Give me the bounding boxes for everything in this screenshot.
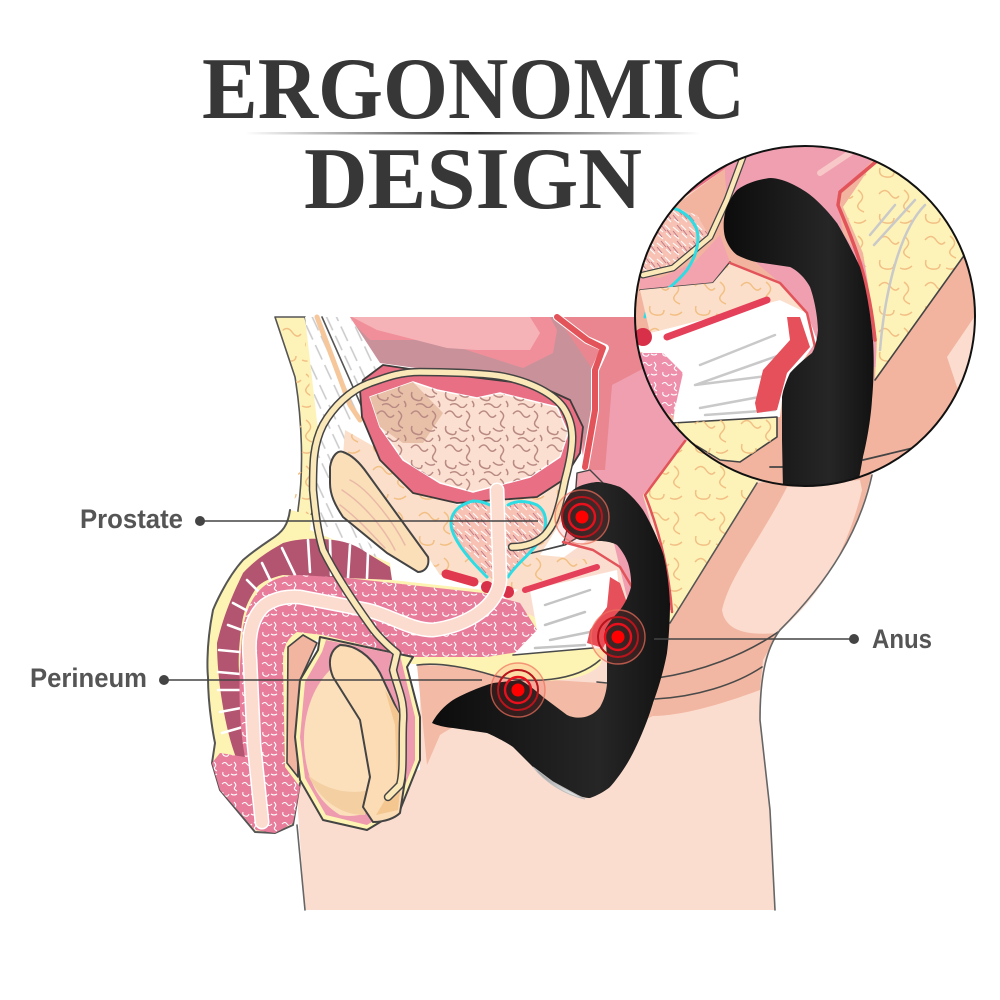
penis base [207, 510, 540, 833]
title: ERGONOMIC [202, 41, 745, 138]
rectal red rim [563, 542, 632, 587]
inset: red rim [838, 160, 878, 340]
rectum pink wall [557, 317, 690, 610]
rectum red line [557, 317, 605, 467]
bladder inner [370, 382, 568, 492]
erectile tissue stripes [218, 540, 368, 733]
inset: white zone [630, 300, 817, 423]
vas deferens tube [313, 372, 572, 797]
product device [432, 482, 670, 798]
inset: prostate [642, 210, 708, 272]
pulse marker: anus [591, 610, 645, 664]
yellow perineal band [413, 648, 607, 681]
sphincter red marks [446, 574, 474, 582]
pulse marker: prostate [555, 490, 609, 544]
inset: rim line [730, 263, 815, 347]
anal canal white zone [513, 570, 622, 655]
sacral fat [643, 437, 770, 623]
inset: red stripe [667, 300, 767, 337]
inset: crease line [770, 448, 913, 467]
abdominal wall fat [270, 317, 318, 540]
callout: anus: Anus [872, 624, 932, 654]
inset: white zone fibres [695, 335, 780, 415]
bladder folds [370, 382, 568, 492]
rectum upper wall [557, 317, 650, 470]
inset: lower left fat [667, 445, 717, 490]
title: DESIGN [304, 131, 642, 228]
peach bulge [287, 635, 317, 777]
inset: peach band [640, 263, 807, 333]
erectile tissue band [217, 539, 392, 760]
body contour [297, 475, 872, 910]
testis [304, 670, 385, 816]
scrotum inner pink [300, 640, 415, 825]
spongy tissue [212, 575, 537, 833]
inset: red patch [755, 317, 810, 413]
prostate outline [451, 501, 546, 577]
inset: spongy tissue [636, 353, 683, 417]
inset: device [724, 178, 874, 490]
inset: tube [643, 157, 743, 275]
perineal peach tissue [417, 665, 653, 765]
inset: rectum pink [725, 140, 880, 367]
prostate [451, 501, 546, 577]
epididymis [330, 645, 405, 822]
bladder shaded patch [370, 382, 443, 443]
buttock highlight [722, 480, 862, 634]
upper abdominal pale layer [352, 317, 540, 350]
inset: rectum highlight [820, 153, 850, 173]
magnified inset circle [630, 140, 990, 490]
inset: lower fat [673, 417, 777, 462]
scrotum outer [295, 637, 420, 830]
pink flap near device head [508, 470, 605, 559]
peach tissue under bladder [343, 430, 595, 592]
upper abdominal pink layer [347, 317, 557, 368]
callout: perineum [30, 663, 482, 693]
pelvic bone [330, 452, 428, 572]
inset: pink flap [640, 235, 730, 290]
callout: prostate: Prostate [80, 504, 183, 534]
bladder outer wall [360, 365, 583, 503]
anal red patch [587, 577, 627, 648]
inset: lower left pink [630, 345, 688, 490]
urethra [249, 490, 500, 822]
white ligament fibres [305, 317, 392, 565]
buttock tissue [645, 470, 872, 716]
upper abdominal mauve layer [347, 317, 595, 467]
anal red stripe [525, 567, 597, 590]
inset: red dot [636, 328, 652, 346]
device button [533, 767, 585, 799]
rectum red line right [645, 441, 685, 612]
title [202, 41, 745, 228]
lower body skin [296, 460, 872, 910]
callout: perineum: Perineum [30, 663, 147, 693]
callout: anus [654, 624, 932, 654]
callout: prostate [80, 504, 538, 534]
inset: sacral fat [843, 163, 963, 378]
sacral fat outline [670, 483, 757, 623]
pulse marker: perineum [491, 663, 545, 717]
anatomy illustration [207, 317, 872, 910]
penis outline [207, 510, 300, 833]
inset: upper left pink [682, 170, 723, 200]
inset: cyan outline [645, 208, 698, 317]
crease lines [597, 632, 778, 699]
pelvic strip [317, 317, 360, 420]
inset: skin highlight [947, 318, 974, 388]
inset: fibres [870, 200, 925, 350]
